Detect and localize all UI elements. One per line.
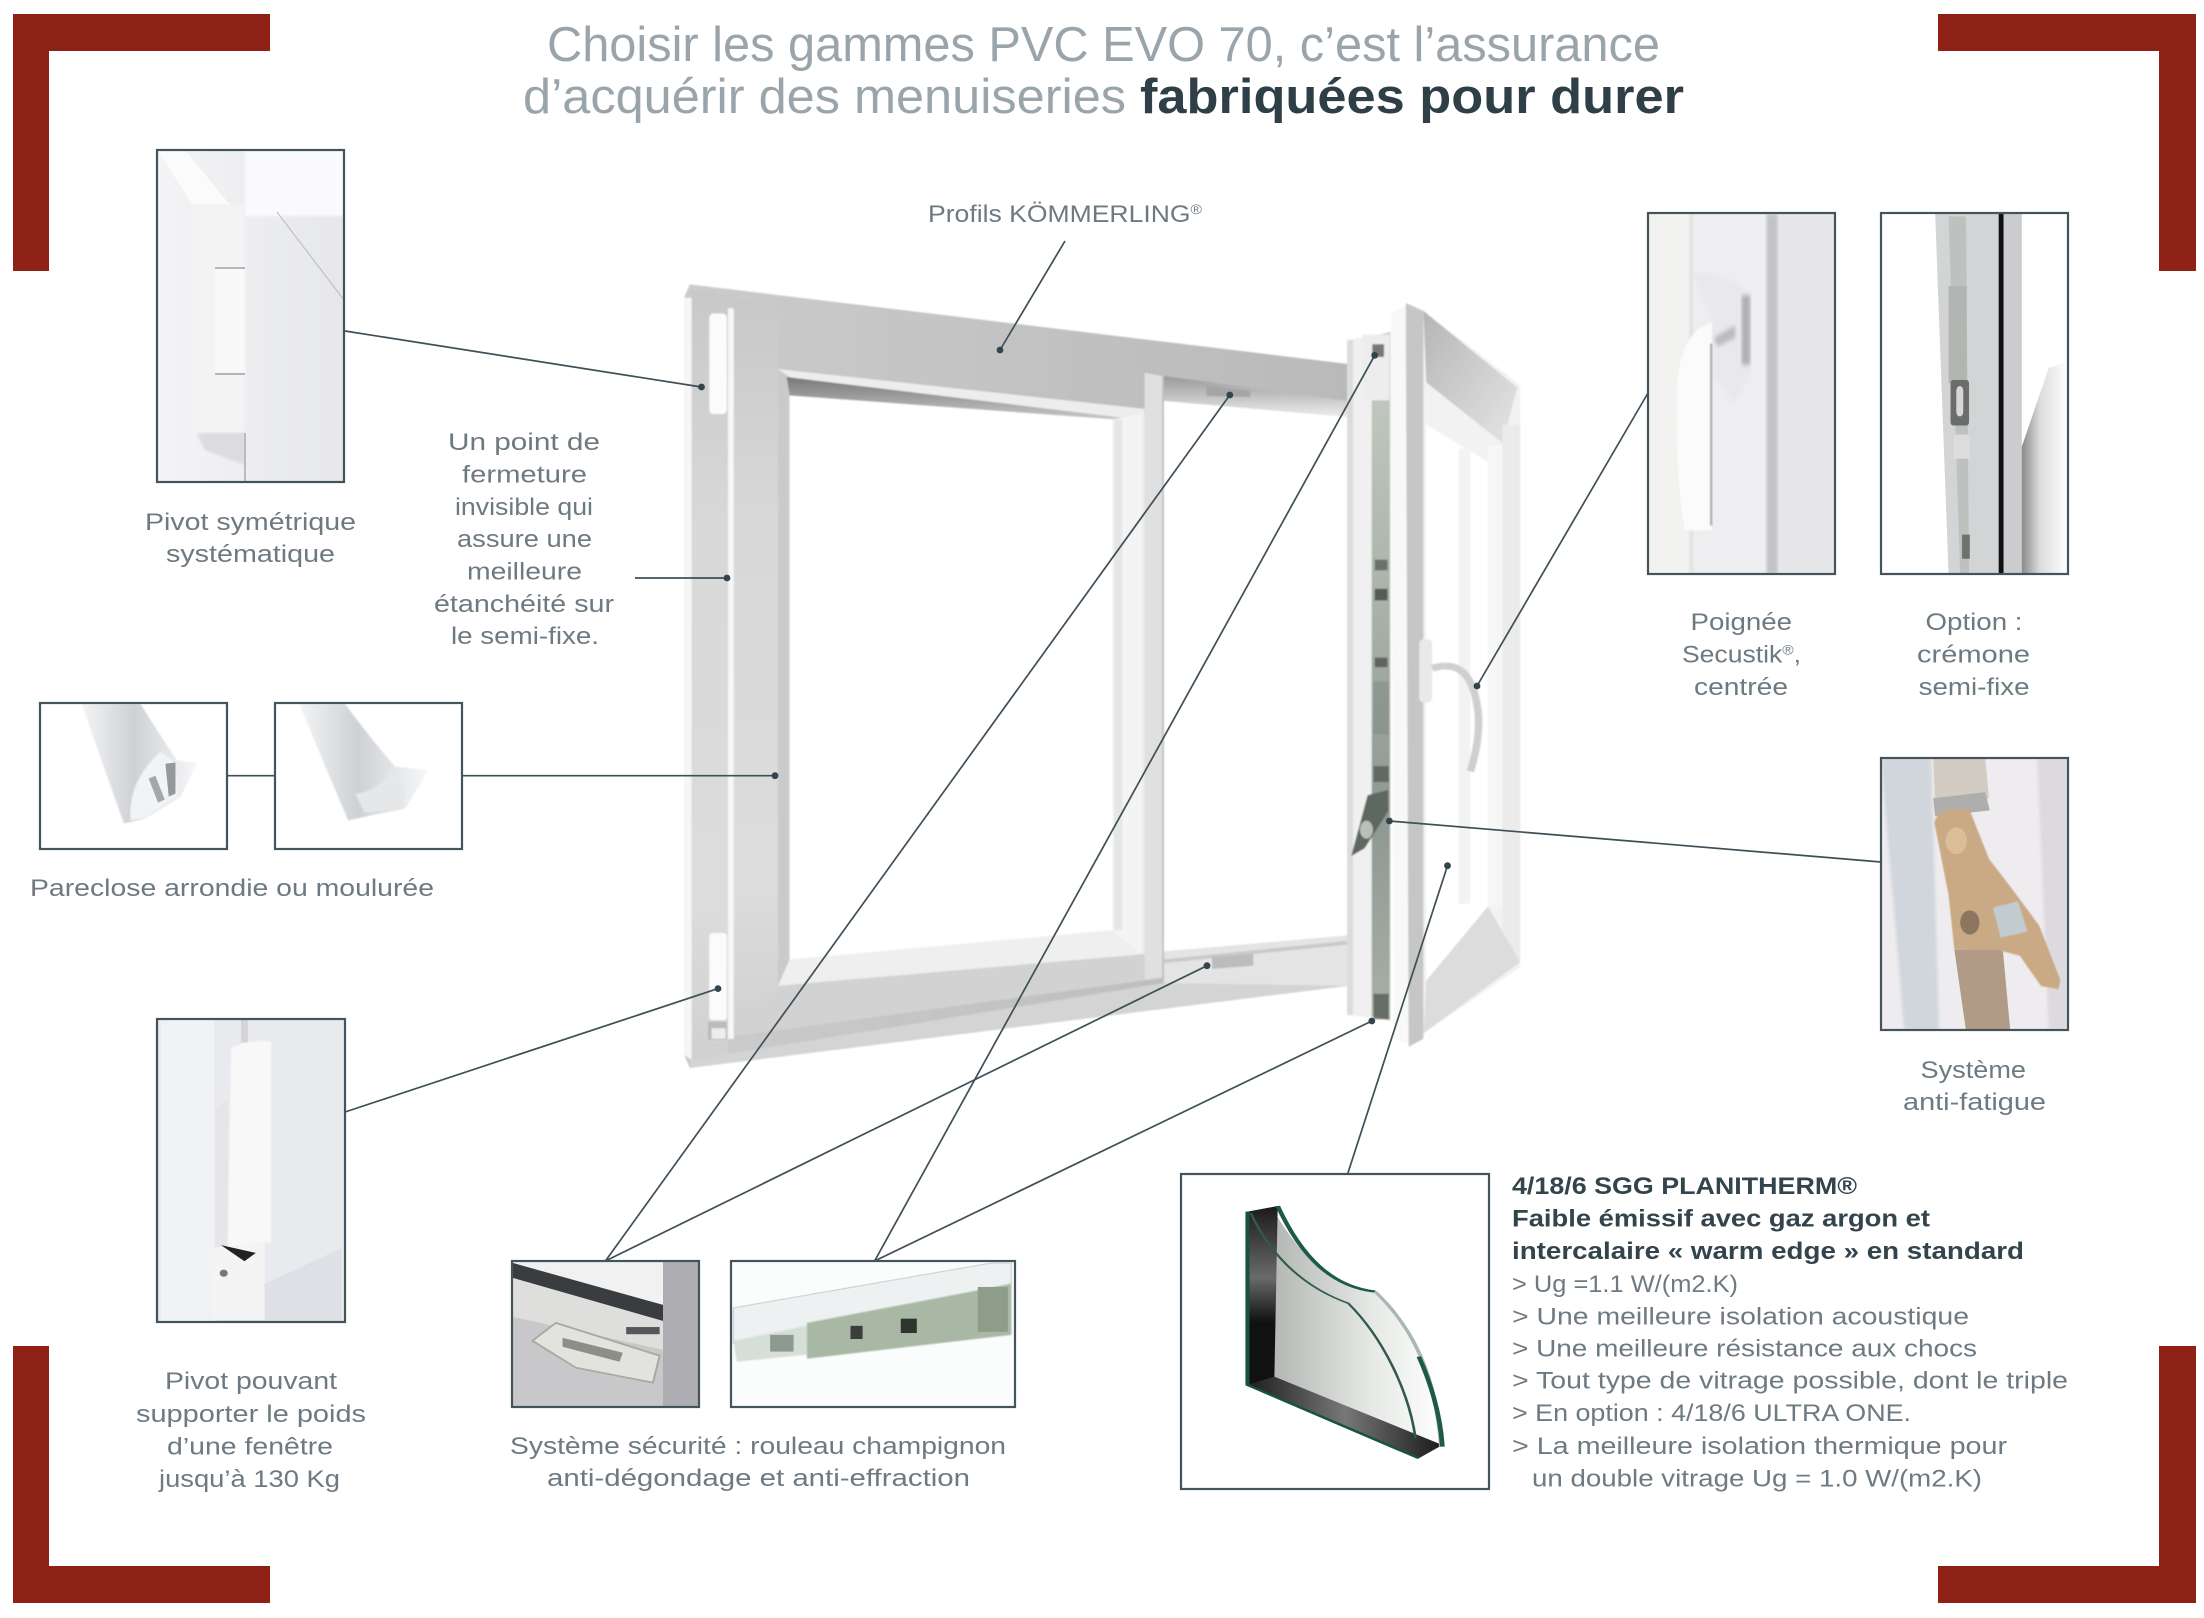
caption: anti-fatigue: Système <box>1920 1057 2026 1084</box>
caption: invisible closing point <box>434 429 614 650</box>
title: fabriquées pour durer <box>1140 70 1684 124</box>
caption: handle <box>1682 609 1801 701</box>
text block: glazing specification: > Une meilleure isolation acoustique <box>1512 1304 1969 1331</box>
photo panel: semi-fixed espagnolette <box>1881 213 2068 575</box>
title <box>523 18 1684 124</box>
label: Profils KÖMMERLING: ® <box>1191 201 1203 217</box>
text block: glazing specification: > La meilleure isolation thermique pour <box>1512 1433 2007 1460</box>
corner bracket: top left <box>13 14 270 271</box>
text block: glazing specification: intercalaire « warm edge » en standard <box>1512 1238 2024 1265</box>
caption: security system: anti-dégondage et anti-effraction <box>547 1465 970 1492</box>
photo panel: symmetric hinge <box>157 150 344 482</box>
photo panel: anti-fatigue mechanism <box>1881 758 2068 1030</box>
photo panel: rounded glazing bead <box>40 703 228 849</box>
text block: glazing specification: > En option : 4/18/6 ULTRA ONE. <box>1512 1400 1911 1427</box>
text block: glazing specification: > Ug =1.1 W/(m2.K) <box>1512 1271 1738 1298</box>
caption: invisible closing point: invisible qui <box>455 494 593 521</box>
corner bracket: top right <box>1938 14 2196 271</box>
window illustration <box>684 284 1520 1068</box>
photo panel: security striker <box>512 1261 699 1408</box>
text block: glazing specification: > Tout type de vitrage possible, dont le triple <box>1512 1368 2068 1395</box>
caption: handle: ® <box>1782 641 1794 657</box>
caption: glazing bead: Pareclose arrondie ou moulurée <box>30 875 434 902</box>
photo panel: moulded glazing bead <box>275 703 463 849</box>
text block: glazing specification: Faible émissif avec gaz argon et <box>1512 1206 1930 1233</box>
caption: symmetric hinge: systématique <box>166 541 335 568</box>
corner bracket: bottom left <box>13 1346 270 1603</box>
caption: load-bearing hinge: jusqu’à 130 Kg <box>158 1466 340 1493</box>
text block: glazing specification: 4/18/6 SGG PLANITHERM® <box>1512 1173 1857 1200</box>
caption: espagnolette option: semi-fixe <box>1919 674 2030 701</box>
photo panel: load-bearing hinge <box>157 1018 345 1323</box>
photo panel: double glazing sample <box>1181 1174 1490 1489</box>
caption: symmetric hinge: Pivot symétrique <box>145 509 356 536</box>
caption: security system <box>510 1433 1006 1492</box>
text block: glazing specification: un double vitrage Ug = 1.0 W/(m2.K) <box>1532 1466 1982 1493</box>
caption: espagnolette option: Option : <box>1926 609 2022 636</box>
caption: anti-fatigue: anti-fatigue <box>1903 1089 2046 1116</box>
caption: handle: Poignée <box>1690 609 1792 636</box>
caption: invisible closing point: le semi-fixe. <box>451 623 599 650</box>
caption: load-bearing hinge <box>136 1368 366 1493</box>
caption: load-bearing hinge: supporter le poids <box>136 1401 366 1428</box>
caption: handle: Secustik <box>1682 641 1773 668</box>
caption: invisible closing point: assure une <box>457 526 592 553</box>
photo panel: mushroom roller <box>731 1261 1015 1408</box>
photo panel: Secustik handle <box>1648 213 1835 575</box>
caption: espagnolette option: crémone <box>1917 641 2030 668</box>
caption: invisible closing point: meilleure <box>467 558 582 586</box>
caption: invisible closing point: fermeture <box>462 462 587 488</box>
title: d’acquérir des menuiseries <box>523 70 1126 124</box>
caption: handle: , <box>1794 641 1801 668</box>
label: Profils KÖMMERLING: Profils KÖMMERLING <box>928 201 1165 228</box>
caption: load-bearing hinge: d’une fenêtre <box>167 1434 333 1460</box>
leader lines and dots <box>227 241 1881 1261</box>
caption: load-bearing hinge: Pivot pouvant <box>165 1368 337 1395</box>
caption: espagnolette option <box>1917 609 2030 701</box>
text block: glazing specification <box>1512 1173 2068 1493</box>
caption: anti-fatigue <box>1903 1057 2046 1116</box>
caption: invisible closing point: Un point de <box>448 429 600 456</box>
caption: security system: Système sécurité : rouleau champignon <box>510 1433 1006 1460</box>
title: Choisir les gammes PVC EVO 70, c’est l’assurance <box>547 18 1660 72</box>
corner bracket: bottom right <box>1938 1346 2196 1603</box>
caption: handle: centrée <box>1694 674 1788 701</box>
open leaf outer frame <box>1423 311 1520 1034</box>
caption: invisible closing point: étanchéité sur <box>434 591 614 618</box>
text block: glazing specification: > Une meilleure résistance aux chocs <box>1512 1336 1977 1363</box>
caption: symmetric hinge <box>145 509 356 568</box>
